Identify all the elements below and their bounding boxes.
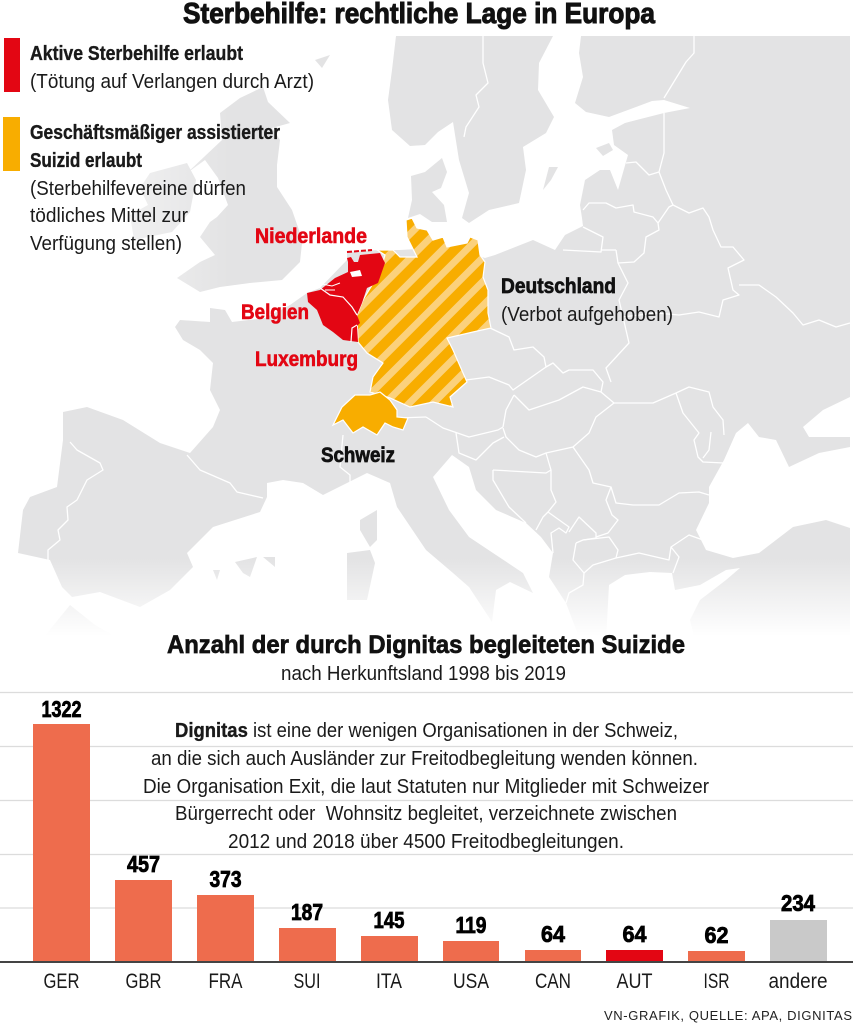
bar: GBR xyxy=(115,851,172,993)
bar: ITA: 145 xyxy=(374,907,405,933)
legend heading: assisted suicide: Suizid erlaubt xyxy=(30,150,142,172)
chart subheading: nach Herkunftsland 1998 bis 2019 xyxy=(281,663,566,685)
bar: GER: GER xyxy=(44,970,80,993)
bar: AUT: AUT xyxy=(616,970,653,993)
text block: Dignitas: Bürgerrecht oder Wohnsitz begleitet, verzeichnete zwischen xyxy=(175,803,677,825)
bar: CAN: CAN xyxy=(535,970,571,993)
bar: SUI xyxy=(279,899,336,993)
bar: AUT xyxy=(606,921,663,993)
text block: Dignitas: 2012 und 2018 über 4500 Freitodbegleitungen. xyxy=(228,831,624,853)
bar: FRA: FRA xyxy=(208,970,242,993)
legend text: assisted suicide xyxy=(30,178,246,255)
legend heading: assisted suicide: Geschäftsmäßiger assistierter xyxy=(30,122,280,144)
map label: Belgien: Belgien xyxy=(241,301,309,324)
map: Europe landmass xyxy=(0,36,853,650)
text block: Dignitas: Die Organisation Exit, die laut Statuten nur Mitglieder mit Schweizer xyxy=(143,776,709,798)
land: continental Europe xyxy=(18,36,850,640)
bar: ISR: 62 xyxy=(704,922,728,948)
legend swatch: orange xyxy=(3,117,20,171)
map label: Luxemburg: Luxemburg xyxy=(255,348,358,371)
bar: SUI: SUI xyxy=(294,970,320,993)
map label: Niederlande: Niederlande xyxy=(255,225,367,248)
bar: USA xyxy=(443,912,499,993)
text block: Dignitas: an die sich auch Ausländer zur Freitodbegleitung wenden können. xyxy=(151,748,698,770)
legend heading: assisted suicide xyxy=(30,122,280,172)
legend text: assisted suicide: tödliches Mittel zur xyxy=(30,205,188,227)
map note: Verbot aufgehoben: (Verbot aufgehoben) xyxy=(501,304,673,326)
bar: GER: 1322 xyxy=(42,696,82,722)
land: Denmark xyxy=(408,158,447,222)
bar: ITA: ITA xyxy=(376,970,402,993)
chart heading: Anzahl der durch Dignitas begleiteten Suizide xyxy=(167,631,685,659)
bar: USA: 119 xyxy=(456,912,486,938)
legend: active euthanasia xyxy=(4,38,314,93)
text block: Dignitas xyxy=(143,720,709,853)
legend text: assisted suicide: (Sterbehilfevereine dürfen xyxy=(30,178,246,200)
bar: AUT: 64 xyxy=(622,921,647,947)
bar: USA: USA xyxy=(453,970,489,993)
bar: GBR: GBR xyxy=(126,970,162,993)
bar: andere xyxy=(768,890,828,993)
bar: GBR: 457 xyxy=(127,851,160,877)
bar: CAN: 64 xyxy=(541,921,565,947)
country borders xyxy=(48,36,850,603)
bar: CAN xyxy=(525,921,581,993)
bar: ITA xyxy=(361,907,418,993)
legend: assisted suicide xyxy=(3,117,280,255)
land: Scandinavia xyxy=(388,36,554,223)
land: Ireland xyxy=(130,163,196,240)
chart axis xyxy=(0,961,853,963)
map label: Deutschland: Deutschland xyxy=(501,275,616,298)
bar: FRA: 373 xyxy=(210,866,242,892)
countries: Netherlands, Belgium, Luxembourg xyxy=(307,250,385,342)
land: Great Britain xyxy=(177,87,302,292)
bar: GER xyxy=(33,696,90,993)
map label: Schweiz: Schweiz xyxy=(321,444,395,467)
source credit: VN-GRAFIK, QUELLE: APA, DIGNITAS xyxy=(604,1008,852,1023)
bar: andere: 234 xyxy=(781,890,815,916)
bar: ISR xyxy=(688,922,745,993)
white area below the map xyxy=(0,636,853,650)
legend text: assisted suicide: Verfügung stellen) xyxy=(30,233,182,255)
text block: Dignitas: Dignitas ist eine der wenigen Organisationen in der Schweiz, xyxy=(175,720,678,742)
bar: ISR: ISR xyxy=(704,970,730,993)
bar: SUI: 187 xyxy=(291,899,323,925)
land: Islands (Corsica, Sardinia, Balearic, Gotland, Saaremaa) xyxy=(40,55,613,642)
legend heading: active euthanasia: Aktive Sterbehilfe erlaubt xyxy=(30,43,243,65)
bar: FRA xyxy=(197,866,254,993)
legend swatch: red xyxy=(4,38,20,92)
bar: andere: andere xyxy=(768,970,828,993)
left fade behind legend xyxy=(100,50,230,300)
bar chart xyxy=(0,692,853,993)
country: Germany (hatched) xyxy=(357,218,491,407)
country: Switzerland xyxy=(333,392,408,435)
bottom fade of the map xyxy=(0,558,853,636)
legend text: active euthanasia: (Tötung auf Verlangen durch Arzt) xyxy=(30,71,314,93)
